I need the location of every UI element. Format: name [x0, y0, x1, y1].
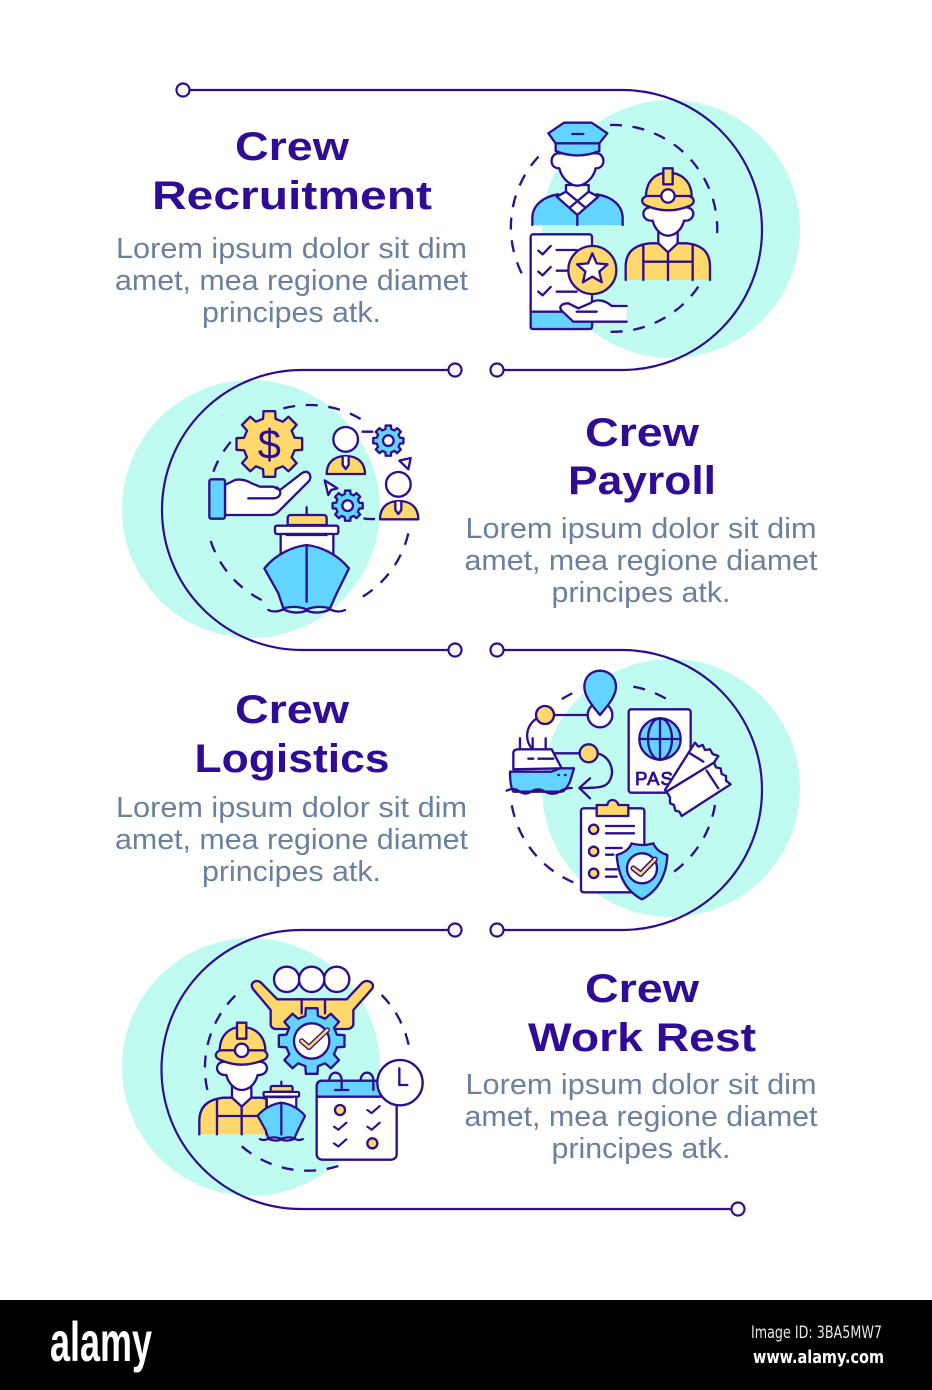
hand — [560, 300, 627, 322]
connector dots — [448, 364, 504, 376]
title: Crew — [585, 967, 700, 1011]
connector line — [497, 650, 762, 930]
title: Crew — [235, 688, 350, 732]
check gear — [279, 1008, 344, 1074]
officer — [532, 123, 623, 225]
star badge — [568, 246, 616, 294]
panel: crew logistics — [115, 644, 800, 930]
staff member one — [327, 427, 365, 474]
description: amet, mea regione diamet — [464, 545, 818, 577]
description: amet, mea regione diamet — [464, 1101, 818, 1133]
subtitle: Payroll — [568, 459, 716, 503]
panel: crew payroll — [122, 364, 818, 650]
connector line — [161, 930, 738, 1209]
connector dots — [448, 644, 504, 656]
footer bar — [0, 1300, 932, 1390]
checklist tablet — [531, 234, 592, 329]
description: Lorem ipsum dolor sit dim — [466, 513, 816, 545]
icon: team, gear, worker, ship and calendar — [199, 967, 423, 1171]
description — [115, 792, 468, 888]
passport — [629, 709, 691, 793]
description: amet, mea regione diamet — [115, 265, 468, 297]
teal circle — [542, 659, 800, 917]
team arms — [252, 981, 373, 1029]
subtitle: Logistics — [194, 737, 390, 781]
teal circle — [542, 100, 800, 358]
calendar — [317, 1073, 397, 1160]
panel: crew recruitment — [115, 84, 800, 370]
worker — [199, 1023, 284, 1134]
footer logo: alamy — [50, 1310, 152, 1373]
tickets — [665, 743, 731, 816]
description: principes atk. — [202, 856, 381, 888]
icon: payroll gear, hand, staff and ship — [209, 405, 418, 613]
connector dots — [448, 924, 744, 1216]
description — [115, 233, 468, 329]
small ship — [258, 1082, 305, 1141]
hand — [209, 472, 310, 519]
passport: PAS — [635, 768, 674, 789]
worker — [626, 168, 710, 280]
panel: crew work rest — [122, 924, 818, 1216]
shield — [617, 843, 667, 899]
description — [464, 1069, 818, 1165]
connector line — [183, 90, 762, 370]
team heads — [274, 967, 349, 992]
image id: Image ID: 3BA5MW7 — [751, 1323, 882, 1343]
title: Crew — [585, 411, 700, 455]
teal circle — [122, 380, 380, 638]
clipboard — [581, 800, 644, 892]
start dot — [176, 84, 190, 96]
description: Lorem ipsum dolor sit dim — [116, 233, 467, 265]
subtitle: Work Rest — [528, 1016, 756, 1060]
clock — [377, 1060, 423, 1105]
website: www.alamy.com — [753, 1347, 884, 1368]
arrowheads — [325, 458, 411, 495]
icon: officer, worker and rated checklist — [511, 123, 717, 332]
icon: route, passport, tickets and clipboard — [507, 671, 731, 899]
route with pin — [527, 671, 616, 798]
ship — [264, 507, 349, 613]
description — [464, 513, 818, 609]
description: principes atk. — [552, 1133, 730, 1165]
staff member two — [380, 472, 418, 519]
blue gears — [333, 426, 403, 521]
description: amet, mea regione diamet — [115, 824, 468, 856]
description: principes atk. — [552, 577, 730, 609]
dollar gear: $ — [258, 421, 281, 468]
title: Crew — [235, 125, 350, 169]
description: Lorem ipsum dolor sit dim — [466, 1069, 816, 1101]
description: Lorem ipsum dolor sit dim — [116, 792, 467, 824]
subtitle: Recruitment — [152, 174, 432, 218]
description: principes atk. — [202, 297, 381, 329]
dollar gear — [236, 411, 302, 477]
small ship — [507, 738, 574, 794]
connector line — [162, 370, 455, 650]
teal circle — [122, 938, 380, 1196]
